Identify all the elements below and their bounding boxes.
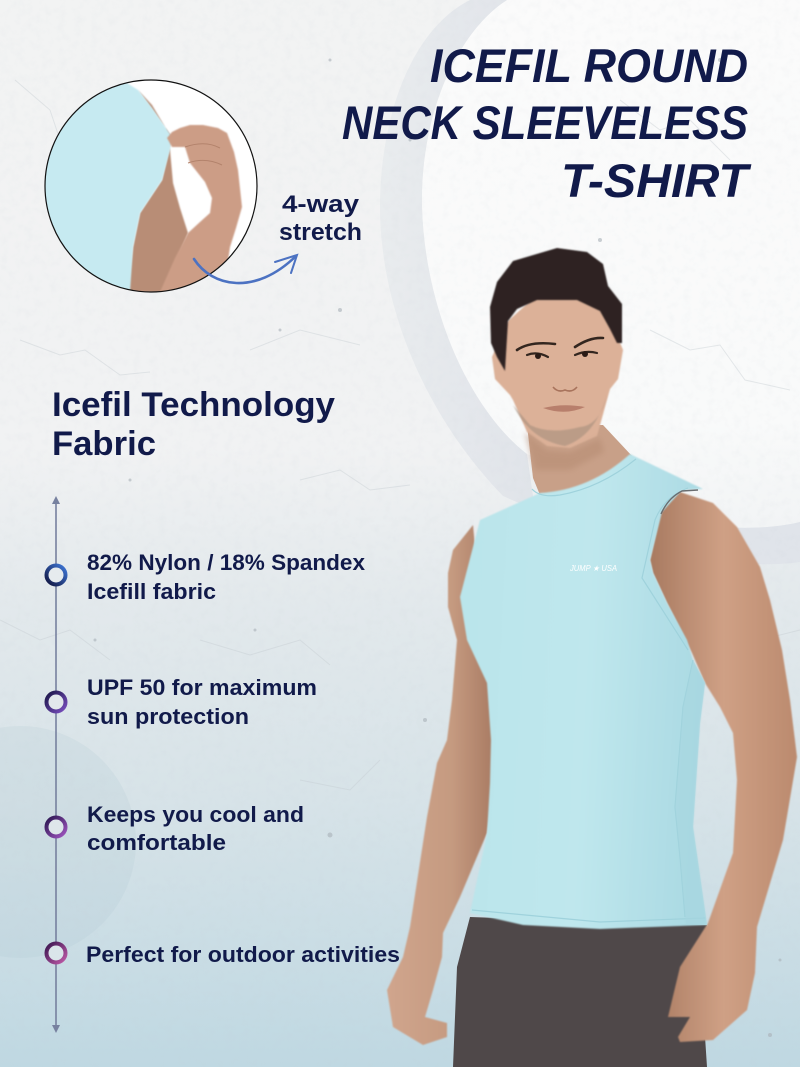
shorts (453, 917, 707, 1067)
bullet 4 (46, 944, 66, 962)
feature 2: UPF 50 for maximum (87, 675, 317, 700)
lips (543, 405, 585, 412)
feature 2 (87, 675, 317, 729)
feature 2: sun protection (87, 704, 249, 729)
title: ICEFIL ROUND (430, 39, 748, 92)
pupils (535, 351, 588, 359)
bullet 2 (46, 692, 66, 712)
nose and mouth (553, 387, 577, 391)
section heading: Fabric (52, 425, 156, 463)
feature 1: 82% Nylon / 18% Spandex (87, 550, 366, 575)
4-way stretch label: 4-way (282, 191, 360, 218)
decorative ring arc (380, 0, 535, 510)
wall speckles (94, 58, 782, 1037)
decorative lower-left circle (0, 726, 136, 958)
feature 3 (87, 802, 304, 855)
timeline axis (52, 496, 60, 1033)
4-way stretch label (279, 191, 362, 246)
neck (527, 425, 632, 495)
feature 3: comfortable (87, 830, 226, 855)
feature 1 (87, 550, 366, 604)
armhole dark edge (661, 490, 698, 514)
inner disc of decorative ring (422, 0, 800, 528)
model figure (387, 248, 797, 1067)
4-way stretch label: stretch (279, 219, 362, 246)
section heading: Icefil Technology (52, 386, 335, 424)
ring arc right end (700, 522, 800, 564)
tank top (460, 454, 707, 929)
bullet 1 (46, 566, 66, 584)
section heading (52, 386, 335, 463)
rear arm (128, 90, 188, 292)
stubble (513, 395, 607, 446)
collar and armhole seams (472, 459, 705, 922)
neck shadow under jaw (525, 432, 604, 470)
right arm (650, 492, 797, 1042)
eyes and brows (517, 338, 603, 357)
title: NECK SLEEVELESS (342, 96, 748, 149)
pulled shirt fabric (40, 80, 172, 292)
title: T-SHIRT (561, 154, 752, 207)
left arm (387, 525, 495, 1045)
feature 3: Keeps you cool and (87, 802, 304, 827)
wall cracks (0, 80, 800, 790)
feature 4: Perfect for outdoor activities (86, 942, 400, 967)
face (492, 295, 623, 448)
shirt side shade (675, 660, 707, 925)
hand and forearm (160, 125, 242, 292)
bullet 3 (46, 818, 66, 836)
feature 1: Icefill fabric (87, 579, 216, 604)
stretch detail photo circle (40, 80, 257, 292)
curved stretch arrow (194, 255, 297, 283)
hair (490, 248, 622, 371)
chest logo: JUMP ★ USA (569, 564, 617, 573)
title (342, 39, 752, 207)
